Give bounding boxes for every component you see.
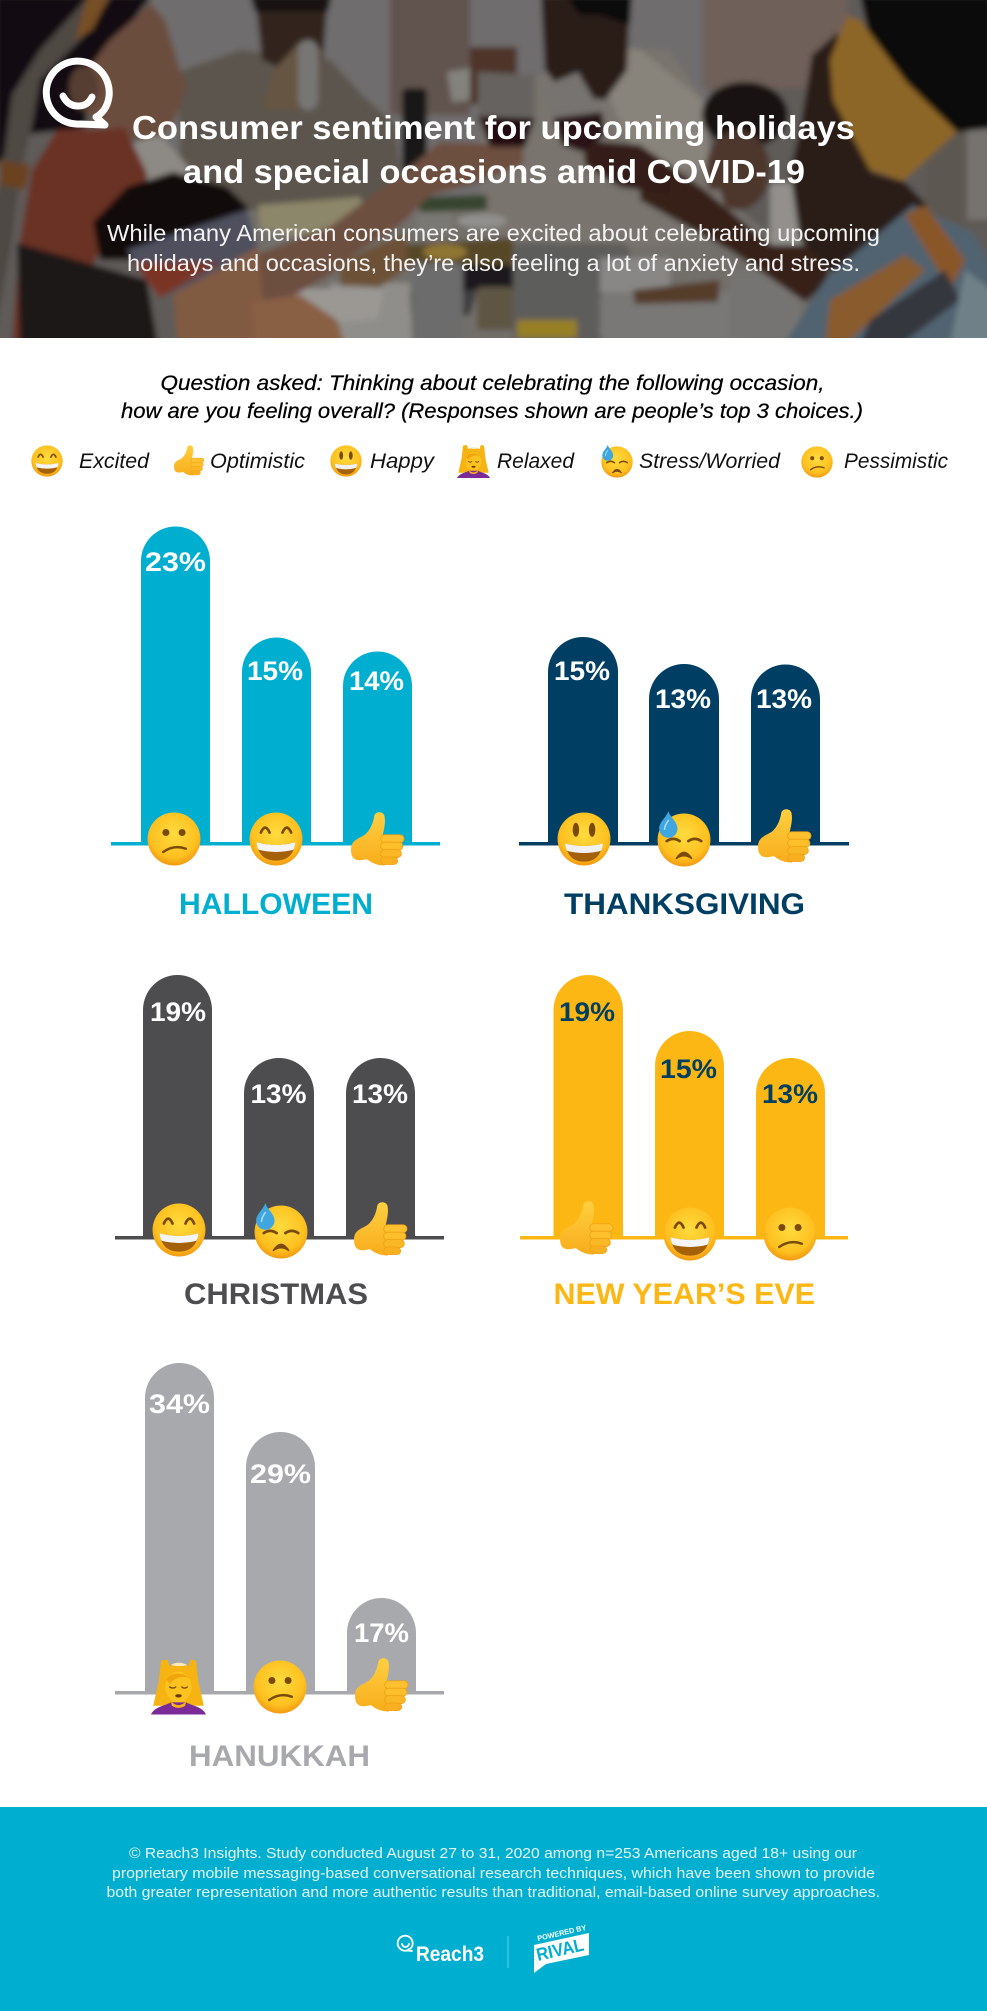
right woman [640,145,830,302]
legend item: optimistic [174,445,305,476]
title: and special occasions amid COVID-19 [183,153,805,190]
footer note: both greater representation and more authentic results than traditional, email-based online survey approaches. [106,1884,880,1901]
values [554,656,812,714]
chart: Halloween [111,526,440,921]
values: 23% [145,547,206,577]
legend item: pessimistic: Pessimistic [844,450,948,473]
legend [31,445,948,478]
values: 13% [352,1079,408,1109]
left arm [255,142,523,312]
values [145,547,404,696]
legend item: happy [330,445,436,477]
man 1 [178,50,405,210]
Rival logo [534,1923,589,1973]
subtitle: While many American consumers are excited about celebrating upcoming [107,220,880,246]
legend item: excited [31,445,150,477]
subtitle [107,220,880,276]
emoji row [558,809,811,866]
values: 13% [250,1079,306,1109]
question text: how are you feeling overall? (Responses shown are people’s top 3 choices.) [121,400,863,423]
chart: Thanksgiving [519,637,849,921]
legend item: stress/worried [601,445,781,478]
panel: footer [0,1807,987,2011]
bars [519,637,849,846]
values: 13% [655,684,711,714]
table dishes [258,197,372,236]
Rival logo: RIVAL [534,1935,586,1965]
emoji row [153,1202,407,1258]
emoji row [560,1201,816,1260]
footer note: © Reach3 Insights. Study conducted August 27 to 31, 2020 among n=253 Americans aged 18+ using our [129,1845,857,1862]
logo: speech bubble [46,61,109,125]
hero photo [0,0,987,350]
bars [115,975,444,1240]
legend item: relaxed: Relaxed [497,450,575,473]
chart: Hanukkah [115,1363,444,1773]
emoji row [151,1658,408,1714]
table [247,208,809,338]
values: 15% [247,656,303,686]
values: 15% [554,656,610,686]
subtitle: holidays and occasions, they’re also feeling a lot of anxiety and stress. [127,250,860,276]
kid [702,82,788,148]
Reach3 logo [398,1936,484,1966]
panel: hero photo header [0,0,987,350]
emoji row [148,812,404,866]
title: Consumer sentiment for upcoming holidays [132,109,855,146]
values: 14% [349,666,404,696]
Reach3 logo: Reach3 [416,1943,484,1966]
label: CHRISTMAS [184,1278,368,1311]
label: NEW YEAR’S EVE [554,1278,815,1311]
values: 19% [559,997,615,1027]
values: 17% [354,1618,409,1648]
bars [520,975,848,1240]
values: 15% [660,1054,717,1084]
legend item: relaxed [457,445,575,478]
wine glasses [478,72,535,117]
left woman [0,0,152,165]
legend item: happy: Happy [370,450,436,473]
bars [111,526,440,846]
footer note: proprietary mobile messaging-based conversational research techniques, which have been shown to provide [112,1865,875,1882]
chart: Christmas [115,975,444,1311]
values [150,997,408,1109]
values: 29% [250,1459,311,1489]
chart: New Year's Eve [520,975,848,1311]
label: HANUKKAH [189,1740,370,1773]
values: 13% [762,1079,818,1109]
legend item: excited: Excited [79,450,150,473]
question text: Question asked: Thinking about celebrating the following occasion, [160,372,824,395]
bars [115,1363,444,1694]
values: 13% [756,684,812,714]
values: 34% [149,1389,210,1419]
man 2 [483,52,706,195]
values: 19% [150,997,206,1027]
values [149,1389,409,1648]
label: HALLOWEEN [179,888,373,921]
legend item: pessimistic [801,446,948,478]
values [559,997,818,1109]
title [132,109,855,190]
footer note [106,1845,880,1901]
legend item: optimistic: Optimistic [210,450,305,473]
legend item: stress/worried: Stress/Worried [639,450,781,473]
label: THANKSGIVING [564,888,805,921]
question text [121,372,863,423]
Rival logo: POWERED BY [536,1923,587,1943]
